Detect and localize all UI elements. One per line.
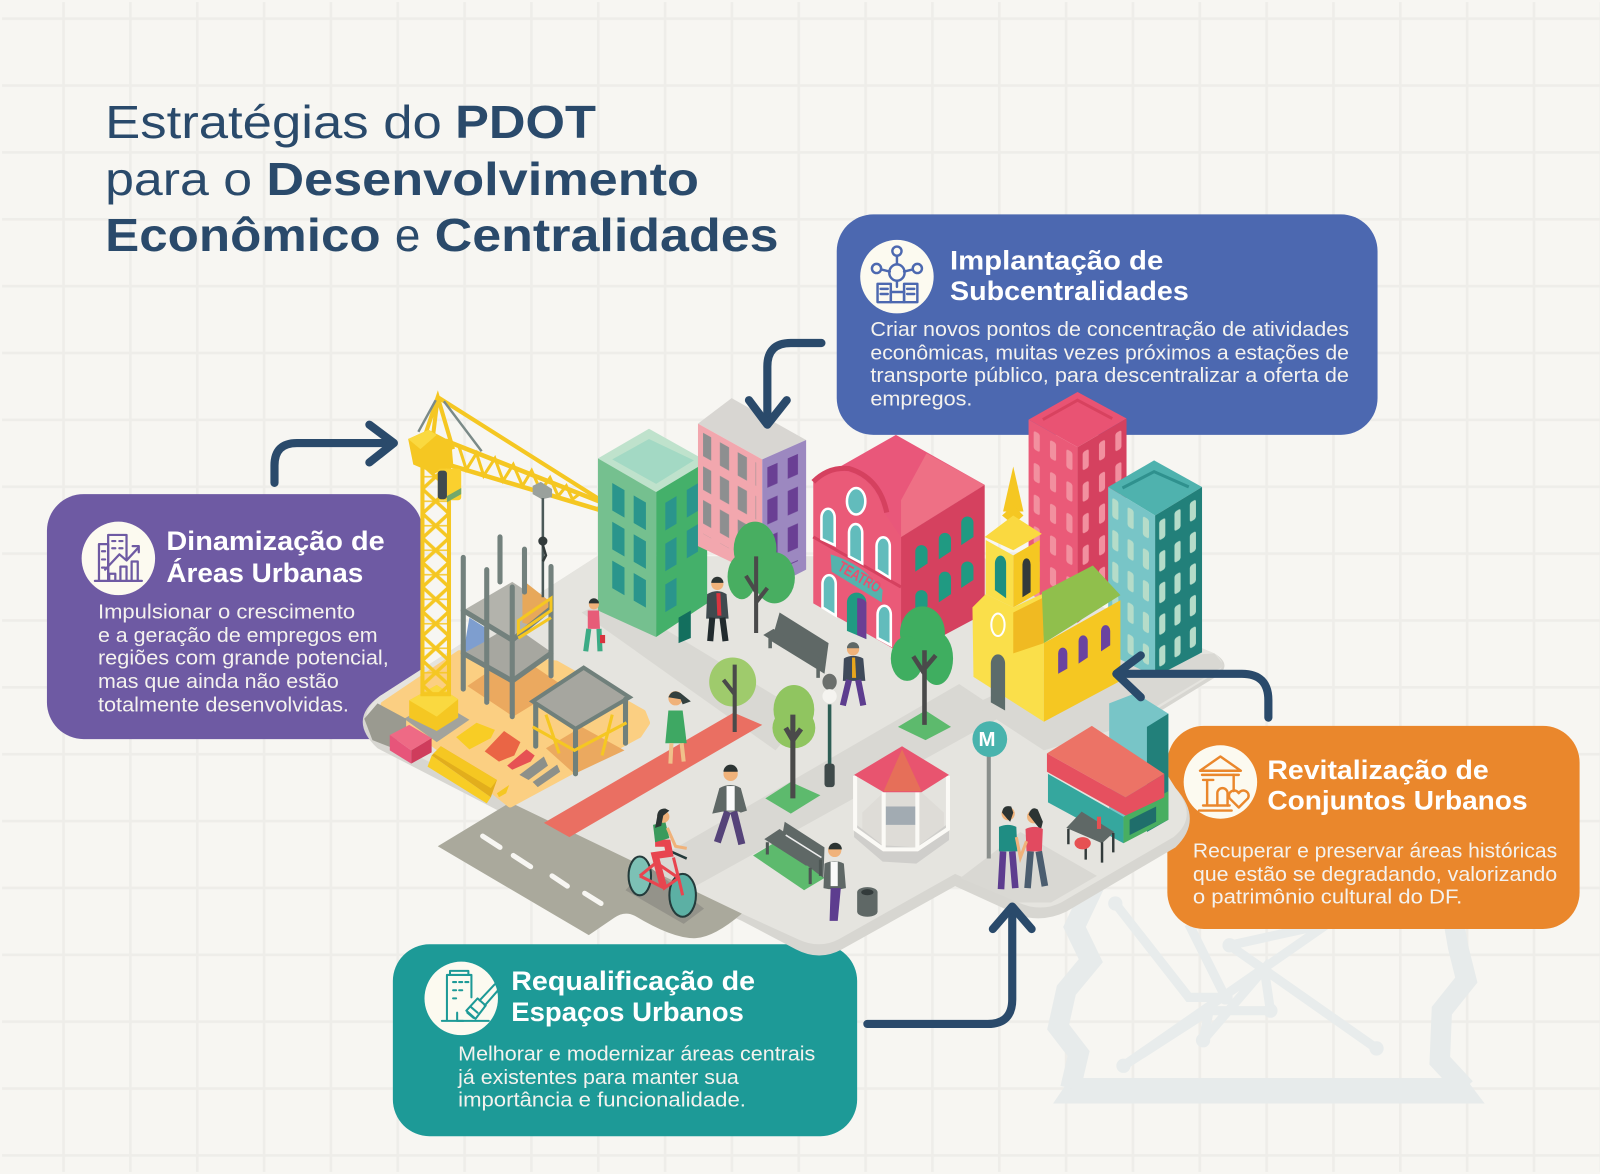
theatre building [813, 435, 985, 664]
text block: regiões com grande potencial, [98, 648, 389, 670]
icon: buildings and rising chart [82, 522, 155, 595]
title: Estratégias do [105, 96, 442, 148]
arrow: left to church [1116, 655, 1268, 718]
watermark: Distrito Federal map [1053, 884, 1485, 1104]
heading: Dinamização de [166, 526, 385, 556]
construction site [364, 397, 647, 804]
shop [1047, 693, 1168, 863]
theatre windows [821, 488, 891, 645]
person: woman with red bag [586, 598, 605, 651]
theatre door [847, 593, 866, 639]
text block [98, 602, 389, 717]
person: woman in green dress [665, 691, 691, 764]
bench on grass [753, 822, 824, 890]
heading: Subcentralidades [950, 276, 1189, 306]
theatre building: TEATRO [835, 558, 884, 597]
person: walking man [712, 765, 747, 844]
small structure [533, 668, 630, 774]
title [105, 96, 779, 261]
text block: econômicas, muitas vezes próximos a estações de [870, 342, 1349, 364]
heading [511, 966, 755, 1027]
text block [457, 1044, 815, 1112]
person: man in suit and red tie [706, 577, 729, 641]
text block: empregos. [870, 388, 972, 410]
text block: totalmente desenvolvidas. [98, 695, 349, 717]
icon: heritage building with heart [1184, 745, 1257, 819]
text block: já existentes para manter sua [457, 1067, 739, 1089]
text block: Criar novos pontos de concentração de atividades [870, 319, 1349, 341]
heading [166, 526, 385, 588]
pink and purple building [698, 398, 807, 592]
text block: transporte público, para descentralizar a oferta de [870, 365, 1349, 387]
tree behind [728, 522, 795, 633]
steel skeleton [463, 537, 553, 717]
metro sign [972, 721, 1007, 859]
icon: building and paint brush [424, 962, 500, 1035]
text block: que estão se degradando, valorizando [1193, 864, 1557, 886]
heading: Conjuntos Urbanos [1267, 786, 1528, 816]
bench near green building [763, 613, 829, 678]
kiosk [854, 746, 949, 864]
heading [1267, 755, 1528, 816]
title: Centralidades [435, 209, 779, 261]
text block: e a geração de empregos em [98, 625, 378, 647]
road [438, 802, 742, 938]
text block: importância e funcionalidade. [458, 1090, 746, 1112]
heading [950, 246, 1189, 306]
text block: Recuperar e preservar áreas históricas [1193, 841, 1557, 863]
pink tower [1029, 392, 1127, 623]
icon: network and buildings [860, 240, 934, 313]
building materials [364, 703, 560, 803]
theatre sign [831, 554, 883, 602]
title: Desenvolvimento [266, 153, 699, 205]
teal tower [1108, 460, 1202, 677]
ground platform [363, 556, 1224, 956]
text block [870, 319, 1349, 410]
text block: Impulsionar o crescimento [98, 602, 355, 624]
streets [582, 597, 1224, 902]
title: PDOT [455, 96, 596, 148]
street lamp [822, 674, 837, 787]
title: e [395, 209, 420, 261]
arrow: to construction crane [274, 425, 394, 483]
person: man with yellow tie [843, 642, 865, 705]
panel: Implantação de Subcentralidades [837, 214, 1378, 435]
church [972, 467, 1120, 722]
person: man near bench [823, 843, 846, 921]
trees [709, 606, 953, 814]
heading: Revitalização de [1267, 755, 1489, 785]
metro sign: M [979, 729, 996, 751]
trash can [857, 887, 878, 917]
title: Econômico [105, 209, 381, 261]
arrow: down to pink building [749, 343, 821, 425]
person: couple holding hands [999, 806, 1045, 889]
crane base [404, 685, 469, 742]
cafe table [1066, 812, 1114, 863]
isometric city illustration [363, 392, 1224, 956]
text block [1193, 841, 1557, 908]
panel: Requalificação de Espaços Urbanos [393, 944, 857, 1136]
heading: Requalificação de [511, 966, 755, 996]
person: cyclist on bicycle [626, 809, 704, 924]
crane tower and jib [408, 397, 604, 694]
heading: Implantação de [950, 246, 1163, 276]
text block: o patrimônio cultural do DF. [1193, 886, 1462, 908]
red bike lane [544, 713, 762, 837]
text block: Melhorar e modernizar áreas centrais [458, 1044, 815, 1066]
arrow: up to plaza [867, 907, 1032, 1024]
panel: Revitalização de Conjuntos Urbanos [1167, 726, 1580, 929]
text block: mas que ainda não estão [98, 671, 339, 693]
green building [598, 429, 707, 643]
heading: Áreas Urbanas [166, 558, 363, 588]
panel: Dinamização de Áreas Urbanas [47, 494, 422, 739]
heading: Espaços Urbanos [511, 997, 744, 1027]
title: para o [105, 153, 252, 205]
